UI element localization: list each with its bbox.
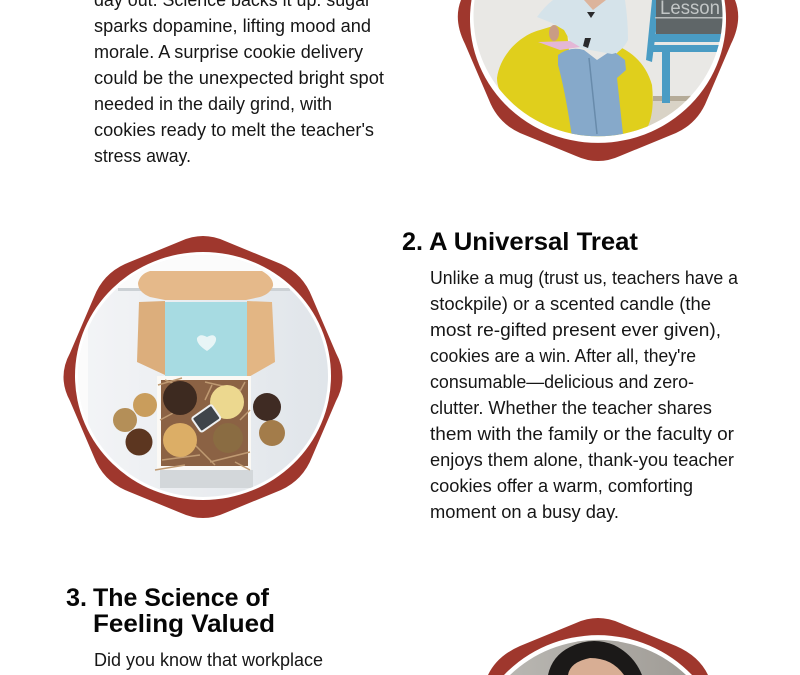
section 2 body text: them with the family or the faculty or bbox=[430, 424, 734, 444]
heading: 3. The Science of Feeling Valued bbox=[66, 584, 275, 638]
section 1 body text: could be the unexpected bright spot bbox=[94, 68, 384, 88]
section 2 body text: consumable—delicious and zero- bbox=[430, 372, 694, 392]
section 2 body text: stockpile) or a scented candle (the bbox=[430, 294, 711, 314]
section 2 body text: cookies offer a warm, comforting bbox=[430, 476, 693, 496]
section 2 body text: Unlike a mug (trust us, teachers have a bbox=[430, 268, 739, 288]
heading: 2. A Universal Treat: 2. bbox=[402, 228, 423, 256]
photo badge: cookie box bbox=[64, 236, 342, 518]
section 2 body text: clutter. Whether the teacher shares bbox=[430, 398, 712, 418]
section 1 body text: needed in the daily grind, with bbox=[94, 94, 332, 114]
heading: 3. The Science of Feeling Valued: Feeling Valued bbox=[93, 610, 275, 638]
section 2 body text: enjoys them alone, thank-you teacher bbox=[430, 450, 734, 470]
section 1 body text: cookies ready to melt the teacher's bbox=[94, 120, 374, 140]
section 2 body text bbox=[430, 268, 739, 522]
section 1 body text bbox=[94, 0, 384, 166]
heading: 2. A Universal Treat: A Universal Treat bbox=[429, 228, 639, 256]
section 1 body text: morale. A surprise cookie delivery bbox=[94, 42, 363, 62]
section 1 body text: sparks dopamine, lifting mood and bbox=[94, 16, 371, 36]
heading: 3. The Science of Feeling Valued: The Science of bbox=[93, 584, 270, 612]
section 1 body text: stress away. bbox=[94, 146, 191, 166]
heading: 3. The Science of Feeling Valued: 3. bbox=[66, 584, 87, 612]
section 2 body text: cookies are a win. After all, they're bbox=[430, 346, 696, 366]
section 2 body text: most re-gifted present ever given), bbox=[430, 320, 721, 340]
section 3 body text: Did you know that workplace bbox=[94, 650, 323, 670]
photo badge: teacher on yellow beanbag bbox=[458, 0, 738, 161]
section 2 body text: moment on a busy day. bbox=[430, 502, 619, 522]
photo badge: smiling woman bbox=[488, 618, 708, 675]
